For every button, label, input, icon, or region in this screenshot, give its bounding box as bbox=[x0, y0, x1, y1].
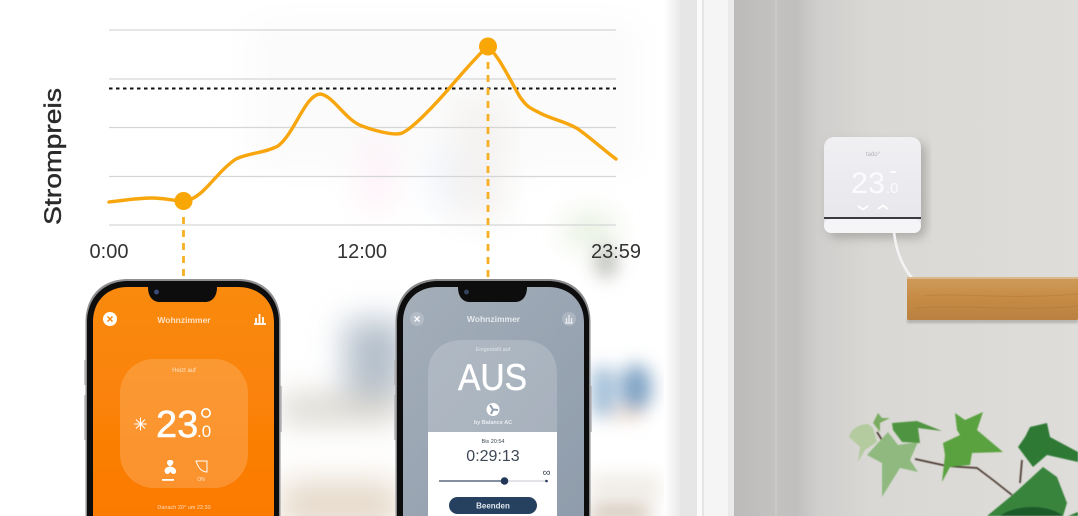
close button bbox=[410, 312, 424, 326]
swing label: ON bbox=[197, 477, 205, 483]
price curve bbox=[109, 47, 616, 202]
side buttons bbox=[85, 360, 281, 440]
chart bbox=[40, 30, 641, 280]
leaf light bbox=[867, 432, 918, 497]
time label start: 0:00 bbox=[90, 241, 128, 263]
marker low bbox=[174, 192, 192, 210]
side buttons bbox=[395, 360, 591, 440]
end button: Beenden bbox=[476, 502, 510, 510]
device temperature display: 23 bbox=[851, 167, 885, 200]
ivy plant bbox=[849, 412, 1078, 516]
device arrows bbox=[858, 206, 888, 210]
cable bbox=[894, 232, 912, 278]
close button bbox=[103, 312, 117, 326]
next schedule: Danach 20° um 22:30 bbox=[157, 505, 211, 511]
sun icon bbox=[134, 418, 147, 430]
camera bbox=[154, 290, 159, 294]
threshold dotted line bbox=[109, 88, 616, 90]
camera bbox=[464, 290, 469, 294]
blurred room background bbox=[0, 0, 680, 516]
stem bbox=[877, 432, 1022, 495]
until time: Bis 20:54 bbox=[482, 439, 504, 445]
axis title: Strompreis bbox=[40, 88, 67, 225]
device degree mark bbox=[890, 171, 896, 173]
time label noon: 12:00 bbox=[337, 241, 387, 263]
dashed connector high bbox=[487, 62, 489, 280]
slider bbox=[439, 477, 548, 485]
smart AC controller device bbox=[824, 137, 926, 278]
countdown: 0:29:13 bbox=[466, 448, 520, 465]
time label end: 23:59 bbox=[591, 241, 641, 263]
dashed connector low bbox=[182, 217, 185, 276]
fan icon bbox=[165, 460, 176, 474]
device decimal: .0 bbox=[886, 180, 899, 197]
wall bbox=[734, 0, 1078, 516]
room name: Wohnzimmer bbox=[467, 314, 521, 324]
swing icon bbox=[196, 461, 207, 472]
leaf small bbox=[873, 413, 890, 432]
phone: heating mode bbox=[85, 279, 281, 516]
phone: balance off mode bbox=[395, 279, 591, 516]
room name: Wohnzimmer bbox=[157, 315, 211, 325]
status card bbox=[428, 340, 557, 516]
window frame bbox=[664, 0, 735, 516]
stats icon bbox=[254, 314, 266, 324]
balance label: by Balance AC bbox=[474, 420, 512, 426]
marker high bbox=[479, 38, 497, 56]
leaf pale bbox=[849, 424, 877, 462]
fan level bbox=[162, 479, 174, 481]
mode label: Heizt auf bbox=[172, 368, 196, 374]
status label: Eingestellt auf bbox=[476, 347, 511, 353]
leaf top bbox=[892, 421, 942, 443]
timer panel bbox=[428, 432, 557, 516]
leaf dark bbox=[1018, 423, 1078, 467]
stats icon bbox=[562, 312, 576, 326]
wooden shelf bbox=[907, 277, 1078, 323]
balance icon bbox=[486, 403, 500, 416]
leaf cluster dark bbox=[987, 467, 1067, 516]
degree bbox=[202, 409, 210, 417]
grid lines bbox=[109, 30, 616, 225]
device brand: tado° bbox=[866, 152, 881, 158]
thermostat card bbox=[120, 359, 248, 488]
leaf bright bbox=[942, 412, 1003, 482]
infinity symbol: ∞ bbox=[543, 467, 550, 479]
off state: AUS bbox=[458, 357, 527, 398]
decimal: .0 bbox=[197, 422, 211, 441]
temperature: 23 bbox=[156, 404, 198, 446]
